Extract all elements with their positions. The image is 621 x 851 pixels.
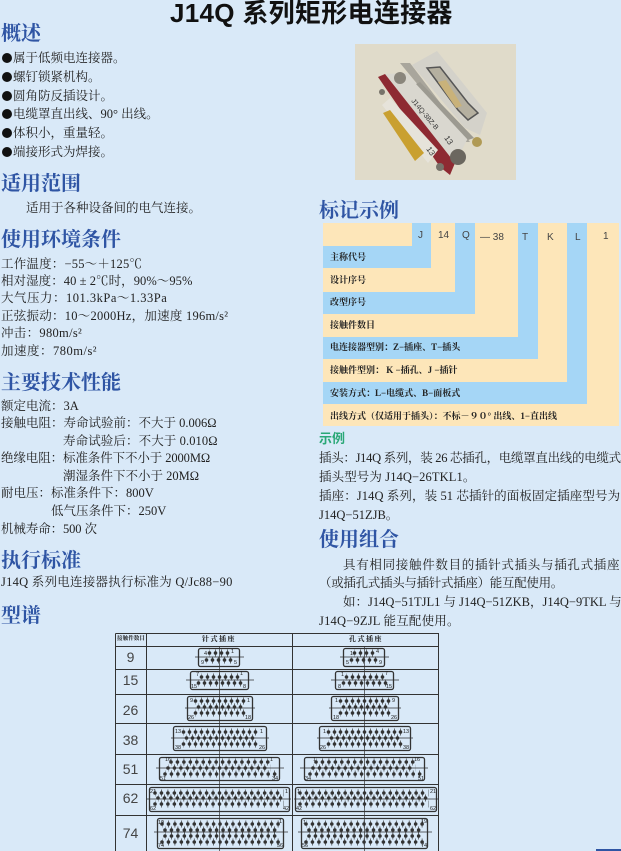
connector 26 socket <box>329 694 401 723</box>
environment text: 工作温度：−55～＋125℃ <box>1 257 142 271</box>
connector 26 socket: 9 <box>392 698 395 704</box>
row counts: 74 <box>123 825 138 841</box>
connector 62 pin: 1 <box>285 789 288 795</box>
usage combination text: J14Q−9ZJL 能互配使用。 <box>319 614 460 628</box>
connector 15 pin: 15 <box>191 684 197 690</box>
connector 15 pin: 7 <box>196 672 199 678</box>
row counts: 9 <box>127 649 134 665</box>
product photo: connector: 13 <box>424 145 437 158</box>
code letters: K <box>547 232 554 243</box>
marking field labels <box>330 252 557 421</box>
row counts: 51 <box>123 761 138 777</box>
marking field labels: 接触件数目 <box>330 320 375 330</box>
connector 51 pin <box>156 754 284 784</box>
overview feature list: 圆角防反插设计。 <box>13 89 113 103</box>
code letters: — 38 <box>480 232 504 243</box>
technical performance text: 额定电流：3A <box>1 399 79 413</box>
overview feature list: 端接形式为焊接。 <box>13 145 113 159</box>
connector 74 pin <box>154 815 288 851</box>
technical performance text: 绝缘电阻：标准条件下不小于 2000MΩ <box>1 451 210 465</box>
connector 62 socket: 42 <box>296 806 302 812</box>
connector 26 pin: 9 <box>190 698 193 704</box>
connector 51 socket: 51 <box>418 776 424 782</box>
connector 74 pin: 74 <box>158 843 164 849</box>
product photo: connector: J14Q-38Z-B <box>409 98 440 132</box>
example heading: 示例 <box>319 431 345 446</box>
connector 9 socket: 5 <box>346 660 349 666</box>
code letters: 14 <box>438 230 449 241</box>
connector 9 pin: 1 <box>231 649 234 655</box>
connector 15 socket: 15 <box>386 684 392 690</box>
usage combination text: （或插孔式插头与插针式插座）能互配使用。 <box>319 576 563 590</box>
heading: scope: 适用范围 <box>1 173 81 195</box>
heading: overview: 概述 <box>1 23 41 45</box>
environment text: 相对湿度：40 ± 2℃时，90%～95% <box>1 274 192 288</box>
product photo: connector: 13 <box>442 134 455 147</box>
connector 74 pin: 1 <box>279 819 282 825</box>
marking field labels: 安装方式：L−电缆式、B−面板式 <box>330 388 460 398</box>
connector 74 socket <box>298 815 432 851</box>
connector 74 pin: 19 <box>158 820 164 826</box>
connector 38 socket: 26 <box>320 745 326 751</box>
connector 51 pin: 34 <box>272 776 278 782</box>
technical performance text: 机械寿命：500 次 <box>1 522 97 536</box>
row counts: 15 <box>123 672 138 688</box>
connector 62 pin: 62 <box>150 806 156 812</box>
connector 9 pin: 5 <box>234 660 237 666</box>
connector 74 socket: 19 <box>421 819 427 825</box>
technical performance text: 接触电阻：寿命试验前：不大于 0.006Ω <box>1 416 217 430</box>
technical performance text: 低气压条件下：250V <box>51 504 166 518</box>
code letters: T <box>522 232 528 243</box>
row counts: 26 <box>123 702 138 718</box>
usage combination text: 如：J14Q−51TJL1 与 J14Q−51ZKB，J14Q−9TKL 与 <box>343 595 621 609</box>
connector 62 socket <box>294 784 438 815</box>
connector 38 socket <box>317 723 413 754</box>
connector 51 pin: 51 <box>160 776 166 782</box>
heading: technical performance: 主要技术性能 <box>1 372 121 394</box>
connector 9 socket: 4 <box>376 649 379 655</box>
marking field labels: 设计序号 <box>330 275 366 285</box>
row counts: 62 <box>123 790 138 806</box>
connector 15 socket <box>331 669 399 694</box>
table header: 针式插座 <box>202 635 236 643</box>
row counts: 38 <box>123 732 138 748</box>
technical performance text: 潮湿条件下不小于 20MΩ <box>63 469 199 483</box>
connector 51 pin: 1 <box>270 757 273 763</box>
connector 74 pin: 56 <box>277 843 283 849</box>
marking field labels: 电连接器型别：Z−插座、T−插头 <box>330 342 460 352</box>
connector 15 socket: 8 <box>338 684 341 690</box>
example text: J14Q−51ZJB。 <box>319 508 398 522</box>
connector 51 socket <box>300 754 428 784</box>
connector 9 pin <box>195 646 244 669</box>
overview feature list <box>2 51 159 159</box>
environment text: 冲击：980m/s² <box>1 326 82 340</box>
connector 9 socket: 1 <box>350 651 353 657</box>
code letters: 1 <box>603 231 609 242</box>
connector 15 pin: 1 <box>240 671 243 677</box>
usage combination text <box>319 558 621 628</box>
heading: marking example: 标记示例 <box>319 200 399 222</box>
connector 38 socket: 13 <box>403 729 409 735</box>
connector 62 socket: 62 <box>430 806 436 812</box>
row counts <box>123 649 138 841</box>
table grid and connectors <box>115 633 439 851</box>
connector 9 pin: 4 <box>204 651 207 657</box>
environment text: 加速度：780m/s² <box>1 344 97 358</box>
connector 51 socket: 16 <box>414 757 420 763</box>
marking field labels: 改型序号 <box>330 297 366 307</box>
connector 51 pin: 16 <box>165 757 171 763</box>
connector 38 socket: 38 <box>403 745 409 751</box>
overview feature list: 属于低频电连接器。 <box>13 51 126 65</box>
connector 62 pin: 21 <box>150 789 156 795</box>
connector 26 pin: 1 <box>247 698 250 704</box>
heading: standard: 执行标准 <box>1 550 81 572</box>
example text <box>319 451 621 522</box>
connector 9 pin: 9 <box>201 660 204 666</box>
technical performance text: 耐电压：标准条件下：800V <box>1 486 154 500</box>
environment text <box>1 257 228 358</box>
usage combination text: 具有相同接触件数目的插针式插头与插孔式插座 <box>343 558 620 572</box>
connector 26 socket: 18 <box>333 715 339 721</box>
connector 26 pin: 26 <box>188 715 194 721</box>
code letters: Q <box>462 230 470 241</box>
connector 26 pin <box>185 694 255 723</box>
connector 15 socket: 7 <box>385 671 388 677</box>
connector 51 socket: 34 <box>305 776 311 782</box>
heading: environment: 使用环境条件 <box>1 229 121 251</box>
connector 26 socket: 26 <box>391 715 397 721</box>
code letters: L <box>575 232 581 243</box>
connector 38 socket: 1 <box>323 729 326 735</box>
connector 62 socket: 21 <box>430 789 436 795</box>
environment text: 大气压力：101.3kPa～1.33Pa <box>1 291 167 305</box>
corner bar <box>596 849 621 851</box>
connector 38 pin: 26 <box>259 745 265 751</box>
example text: 插头：J14Q 系列，装 26 芯插孔，电缆罩直出线的电缆式 <box>319 451 621 465</box>
table header: 接触件数目 <box>117 636 145 642</box>
example text: 插座：J14Q 系列，装 51 芯插针的面板固定插座型号为 <box>319 489 620 503</box>
connector 38 pin: 38 <box>175 745 181 751</box>
connector 26 socket: 1 <box>335 698 338 704</box>
connector 74 socket: 74 <box>421 843 427 849</box>
standard text: J14Q 系列电连接器执行标准为 Q/Jc88−90 <box>1 575 233 589</box>
connector 9 socket <box>340 646 389 669</box>
connector 15 pin: 8 <box>243 684 246 690</box>
example text: 插头型号为 J14Q−26TKL1。 <box>319 470 475 484</box>
marking field labels: 接触件型别： K −插孔、J −插针 <box>330 365 458 375</box>
connector 38 pin: 1 <box>260 729 263 735</box>
connector 15 pin <box>186 669 254 694</box>
technical performance text <box>1 399 218 536</box>
blue code bands <box>323 223 587 404</box>
connector 38 pin <box>171 723 269 754</box>
environment text: 正弦振动：10～2000Hz，加速度 196m/s² <box>1 309 228 323</box>
connector 9 socket: 9 <box>379 660 382 666</box>
scope text: 适用于各种设备间的电气连接。 <box>26 201 201 215</box>
marking field labels: 出线方式（仅适用于插头）：不标－９０° 出线、1−直出线 <box>330 411 557 421</box>
connector 26 pin: 18 <box>245 715 251 721</box>
technical performance text: 寿命试验后：不大于 0.010Ω <box>63 434 218 448</box>
marking code diagram <box>323 223 619 426</box>
overview feature list: 电缆罩直出线、90° 出线。 <box>13 107 159 121</box>
connector 38 pin: 13 <box>175 729 181 735</box>
marking field labels: 主称代号 <box>330 252 366 262</box>
table header: 孔式插座 <box>349 635 383 643</box>
connector 62 pin <box>147 784 291 815</box>
connector 62 socket: 1 <box>297 789 300 795</box>
connector 51 socket: 1 <box>313 757 316 763</box>
connector 74 socket: 1 <box>303 820 306 826</box>
heading: usage combination: 使用组合 <box>319 529 399 551</box>
heading: models: 型谱 <box>1 605 41 627</box>
models table <box>115 633 439 851</box>
connector 15 socket: 1 <box>341 672 344 678</box>
code letters: J <box>418 230 423 241</box>
connector 62 pin: 42 <box>283 806 289 812</box>
overview feature list: 螺钉锁紧机构。 <box>13 70 101 84</box>
code letters <box>418 230 609 243</box>
connector 74 socket: 56 <box>302 843 308 849</box>
product photo: connector <box>355 44 516 180</box>
table header <box>117 634 383 643</box>
overview feature list: 体积小，重量轻。 <box>13 126 113 140</box>
